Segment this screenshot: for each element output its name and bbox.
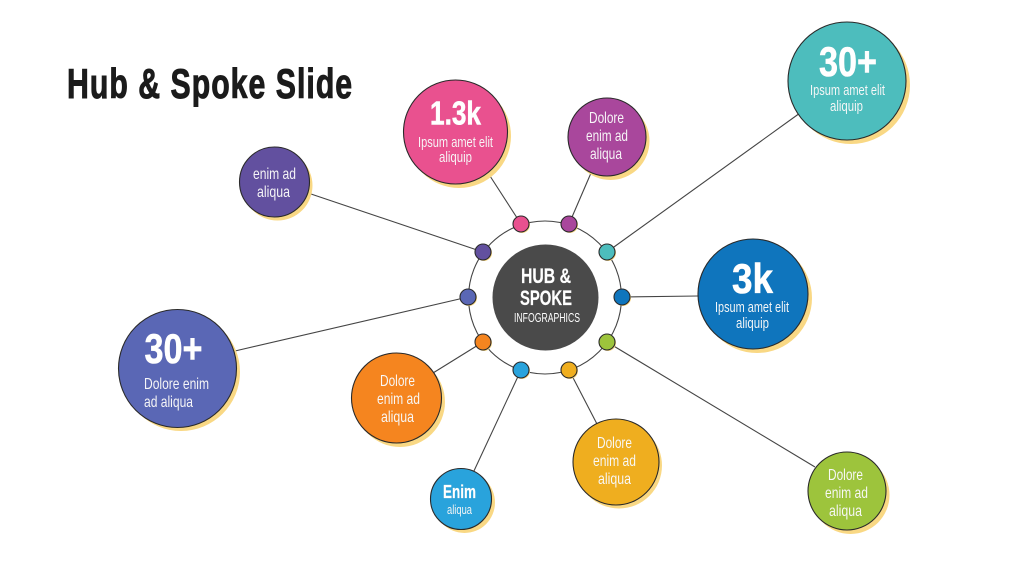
value: 30+: 30+: [819, 38, 877, 85]
hub heading: HUB &: [521, 265, 571, 288]
caption line 2: ad aliqua: [144, 394, 193, 411]
circle: teal 30+: [788, 22, 910, 144]
caption: [825, 467, 868, 520]
caption line 1: Ipsum amet elit: [418, 134, 494, 151]
caption: aliqua: [598, 471, 631, 488]
circle: blue 3k: [698, 239, 812, 353]
caption: Dolore: [597, 435, 632, 452]
caption: enim ad: [253, 166, 296, 183]
circle: magenta dolore: [568, 98, 650, 180]
caption: enim ad: [593, 453, 636, 470]
caption: enim ad: [586, 128, 628, 145]
value: 1.3k: 1.3k: [430, 94, 482, 132]
caption: Dolore: [380, 373, 415, 390]
spokes connecting hub ring to outer circles: [235, 113, 815, 473]
caption: [377, 373, 420, 426]
title: Hub & Spoke Slide: [67, 60, 352, 107]
node: teal: [599, 244, 616, 261]
value: 30+: 30+: [144, 325, 202, 372]
caption line 1: Ipsum amet elit: [810, 82, 886, 99]
hub ring: [468, 221, 622, 374]
caption: aliqua: [257, 184, 290, 201]
ring nodes: [460, 216, 631, 379]
caption line 2: aliquip: [736, 315, 769, 332]
caption line 2: aliquip: [830, 98, 863, 115]
caption: enim ad: [377, 391, 420, 408]
node: sky blue: [513, 362, 530, 379]
circle: sky blue enim: [430, 468, 495, 533]
caption: [593, 435, 636, 488]
circle: indigo 30+: [118, 310, 240, 431]
caption: aliqua: [381, 409, 414, 426]
caption: aliqua: [829, 503, 862, 520]
circle: violet enim ad: [240, 147, 312, 220]
caption line 2: aliquip: [439, 149, 472, 166]
circle: orange dolore: [352, 353, 445, 447]
node: blue: [614, 289, 631, 306]
caption: Dolore: [828, 467, 863, 484]
hub centre circle: [492, 244, 598, 350]
caption: aliqua: [590, 146, 622, 163]
caption: [253, 166, 296, 201]
circle: green dolore: [808, 452, 890, 534]
caption: aliqua: [447, 502, 473, 517]
hub heading second line: SPOKE: [520, 287, 572, 310]
node: magenta: [561, 216, 578, 233]
node: indigo: [460, 289, 477, 306]
node: amber: [561, 362, 578, 379]
value: Enim: Enim: [443, 482, 476, 502]
hub subheading: INFOGRAPHICS: [514, 311, 580, 325]
node: green: [599, 334, 616, 351]
value: 3k: 3k: [732, 255, 774, 302]
node: orange: [475, 334, 492, 351]
circle: pink 1.3k: [404, 80, 511, 188]
node: pink: [513, 216, 530, 233]
caption: Dolore: [589, 110, 624, 127]
caption line 1: Ipsum amet elit: [715, 299, 790, 316]
node: violet: [475, 244, 492, 261]
caption: enim ad: [825, 485, 868, 502]
caption line 1: Dolore enim: [144, 376, 209, 393]
circle: amber dolore: [573, 419, 662, 508]
caption: [586, 110, 628, 163]
